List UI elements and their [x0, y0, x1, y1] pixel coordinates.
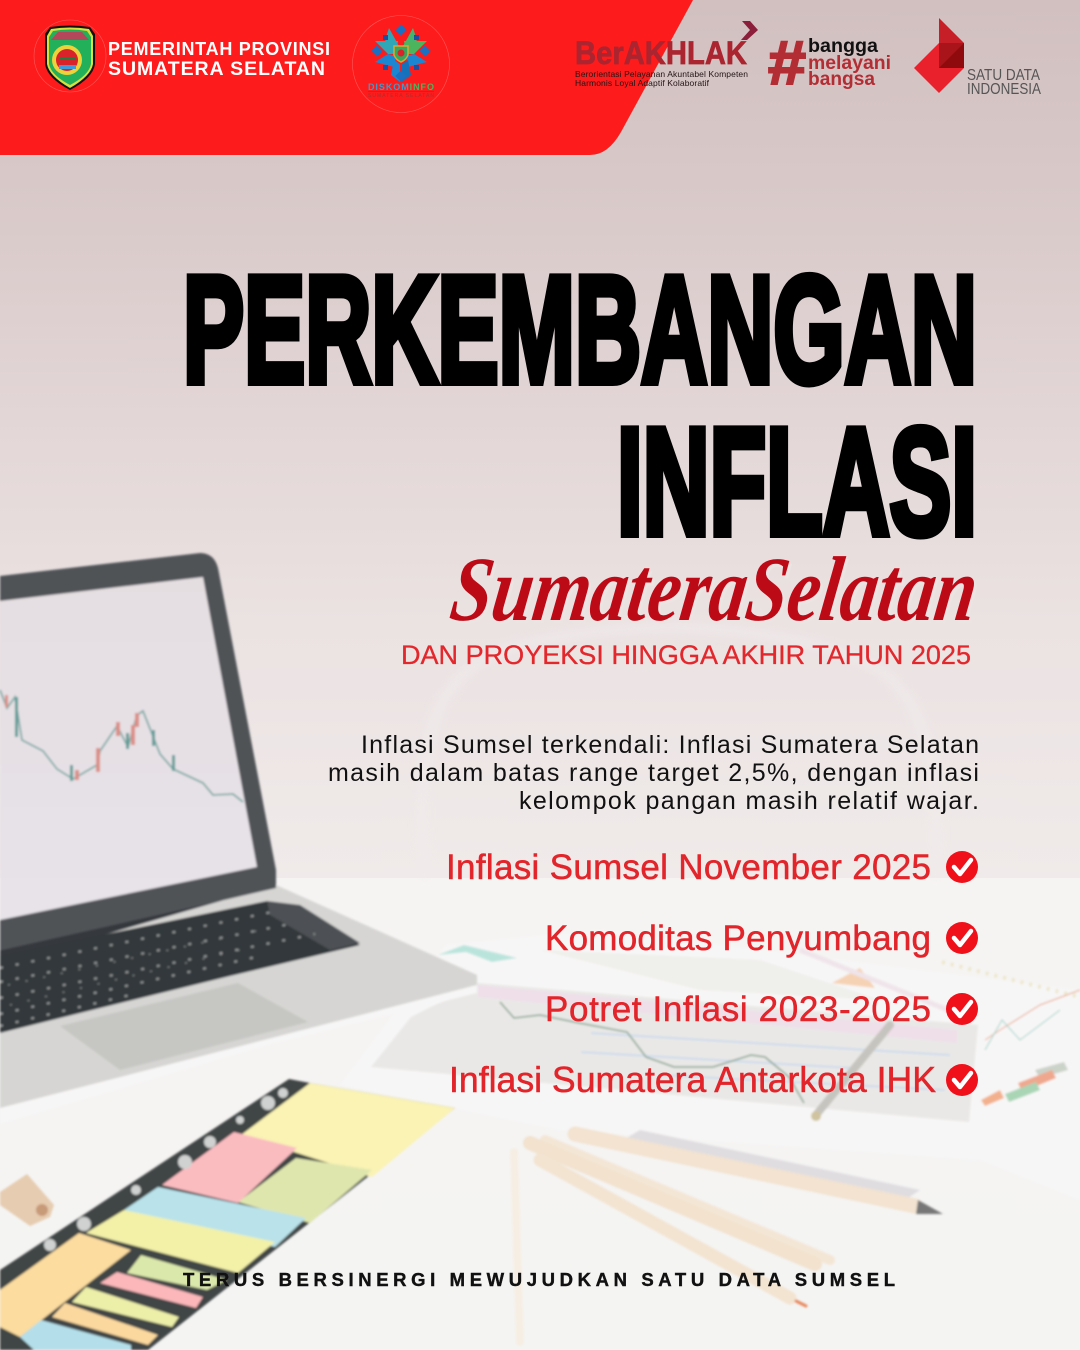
item: Potret Inflasi 2023-2025: Potret Inflasi 2023-2025 — [545, 990, 931, 1029]
description text: Inflasi Sumsel terkendali: Inflasi Sumatera Selatan — [361, 731, 979, 759]
logo: bangga melayani bangsa — [768, 29, 891, 98]
header organisation name: SUMATERA SELATAN — [108, 58, 325, 80]
header organisation name — [108, 39, 330, 80]
logo: Diskominfo: DISKOMINFO — [368, 82, 434, 92]
laptop — [0, 553, 477, 1124]
description text — [328, 731, 979, 815]
logo: BerAKHLAK: Berorientasi Pelayanan Akuntabel Kompeten — [575, 69, 748, 79]
subtitle line: DAN PROYEKSI HINGGA AKHIR TAHUN 2025 — [401, 640, 971, 670]
description text: masih dalam batas range target 2,5%, dengan inflasi — [328, 759, 979, 787]
sticky notes — [0, 1079, 455, 1350]
title — [183, 245, 977, 567]
logo: bangga melayani bangsa: bangsa — [808, 69, 875, 90]
chair ghost — [422, 628, 936, 878]
logo: bangga melayani bangsa: bangga — [808, 36, 878, 57]
header organisation name: PEMERINTAH PROVINSI — [108, 39, 330, 59]
logo: bangga melayani bangsa: melayani — [808, 53, 891, 74]
papers on the desk — [340, 930, 1080, 1200]
logo: Satu Data Indonesia: SATU DATA — [967, 67, 1041, 84]
pencils — [514, 1130, 943, 1342]
item: Inflasi Sumsel November 2025: Inflasi Sumsel November 2025 — [446, 848, 931, 887]
logo: BerAKHLAK — [575, 21, 758, 88]
checklist — [446, 848, 978, 1100]
logo: Pemerintah Provinsi shield — [34, 20, 106, 92]
logo: Diskominfo — [352, 16, 450, 112]
logo: Satu Data Indonesia — [914, 18, 1042, 98]
logo: Satu Data Indonesia: INDONESIA — [967, 81, 1042, 98]
item: Inflasi Sumatera Antarkota IHK: Inflasi Sumatera Antarkota IHK — [449, 1059, 936, 1100]
logo: Diskominfo: SUMATERA SELATAN — [368, 93, 434, 99]
description text: kelompok pangan masih relatif wajar. — [519, 787, 979, 815]
footer tagline: TERUS BERSINERGI MEWUJUDKAN SATU DATA SUMSEL — [183, 1269, 895, 1290]
logo: BerAKHLAK: BerAKHLAK — [575, 35, 747, 71]
logo: bangga melayani bangsa: # — [768, 29, 806, 98]
item: Komoditas Penyumbang: Komoditas Penyumbang — [545, 919, 931, 958]
red header banner — [0, 0, 693, 155]
logo: BerAKHLAK: Harmonis Loyal Adaptif Kolaboratif — [575, 78, 710, 88]
